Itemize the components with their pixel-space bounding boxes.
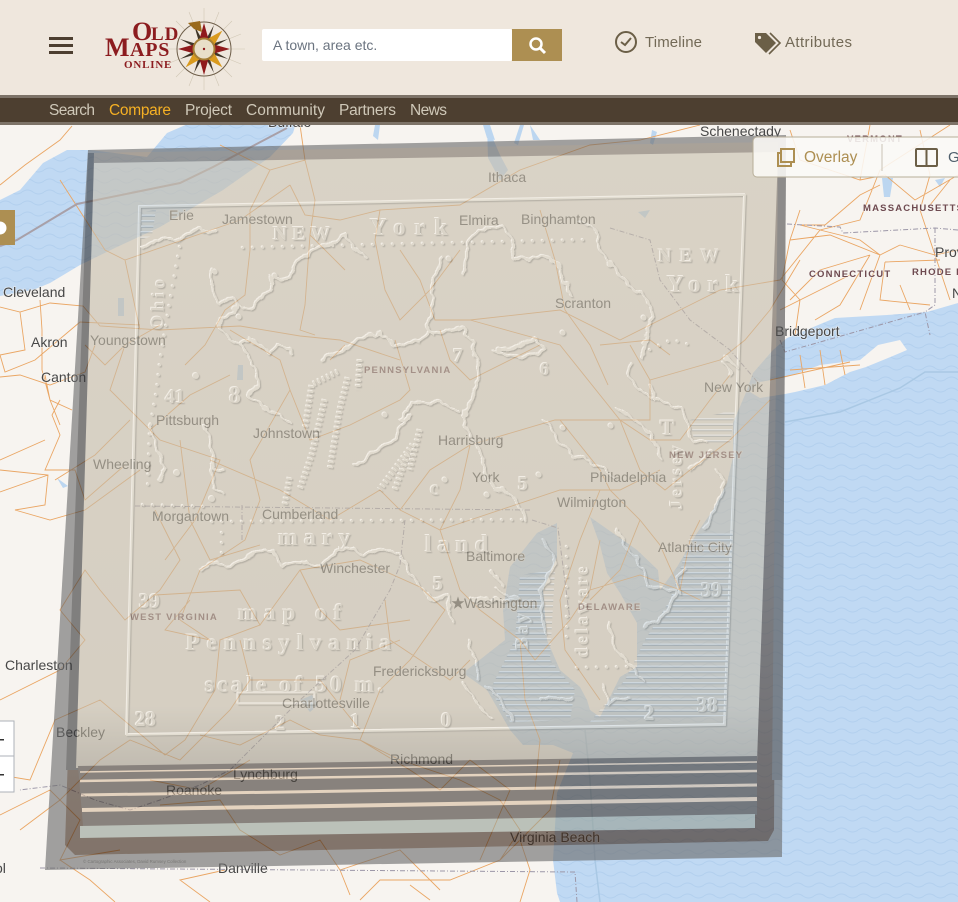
map place labels: Charleston bbox=[5, 657, 73, 673]
map place labels: Ithaca bbox=[488, 169, 526, 185]
state borders bbox=[20, 224, 958, 902]
map place labels: VERMONT bbox=[847, 134, 903, 145]
embossed lettering: 5 bbox=[433, 573, 443, 595]
dark right cover edge bbox=[772, 160, 786, 780]
map place labels: Youngstown bbox=[90, 332, 166, 348]
embossed lettering: 0 bbox=[441, 708, 452, 732]
scale bar bbox=[238, 693, 315, 704]
logo wordmark: ONLINE bbox=[124, 59, 172, 71]
map place labels: Johnstown bbox=[253, 425, 320, 441]
map place labels: Baltimore bbox=[466, 548, 525, 564]
attributes button: Attributes bbox=[785, 34, 852, 51]
map place labels: NEW JERSEY bbox=[669, 450, 743, 461]
embossed lettering: Pennsylvania bbox=[186, 630, 398, 655]
embossed lettering: 6 bbox=[540, 359, 549, 379]
map place labels: Cumberland bbox=[262, 506, 338, 522]
embossed lettering: York bbox=[370, 215, 457, 241]
inland lakes bbox=[57, 125, 945, 712]
map place labels: Harrisburg bbox=[438, 432, 503, 448]
rivers bbox=[143, 223, 737, 720]
embossed lettering: York bbox=[667, 272, 746, 298]
map place labels: Elmira bbox=[459, 212, 499, 228]
map place labels: Wilmington bbox=[557, 494, 626, 510]
embossed city dots bbox=[174, 256, 647, 502]
scan credit line: © Cartographic Associates, David Rumsey Collection bbox=[83, 859, 187, 864]
logo wordmark: APS bbox=[130, 39, 170, 61]
dark left cover edge bbox=[66, 153, 94, 770]
map place labels: CONNECTICUT bbox=[809, 269, 891, 280]
map place labels: York bbox=[472, 469, 501, 485]
navigation bar: Partners bbox=[339, 102, 396, 119]
overlaid historic embossed map, semi-transparent bbox=[45, 135, 786, 870]
compare mode panel bbox=[753, 137, 958, 177]
embossed lettering: 38 bbox=[697, 693, 718, 717]
embossed lettering: 1 bbox=[350, 709, 360, 733]
map place labels: Wheeling bbox=[93, 456, 151, 472]
scan background bbox=[45, 135, 786, 870]
left map badge bbox=[0, 210, 15, 245]
map place labels: Washington bbox=[464, 595, 537, 611]
map place labels: WEST VIRGINIA bbox=[130, 612, 218, 623]
international boundary on Lake Erie bbox=[0, 128, 287, 246]
embossed lettering: c bbox=[430, 478, 439, 500]
map place labels: Richmond bbox=[390, 751, 453, 767]
ridge marks bbox=[285, 360, 420, 505]
map place labels: Scranton bbox=[555, 295, 611, 311]
embossed lettering: T bbox=[660, 415, 675, 440]
map place labels: Akron bbox=[31, 334, 68, 350]
embossed lettering bbox=[135, 215, 746, 735]
logo bbox=[105, 8, 245, 90]
embossed lettering: delaware bbox=[572, 564, 592, 658]
map place labels: Roanoke bbox=[166, 782, 222, 798]
search box bbox=[262, 29, 562, 61]
logo wordmark: M bbox=[105, 33, 130, 62]
printed inner frame bbox=[127, 195, 745, 735]
map place labels: Jamestown bbox=[222, 211, 293, 227]
map place labels: Beckley bbox=[56, 724, 105, 740]
embossed lettering: 7 bbox=[453, 345, 463, 367]
map place labels: Erie bbox=[169, 207, 194, 223]
navigation bar: Project bbox=[185, 102, 233, 119]
book cover bbox=[65, 142, 778, 855]
map place labels: Atlantic City bbox=[658, 539, 732, 555]
embossed lettering: Jersey bbox=[666, 443, 686, 510]
embossed lettering: Bay bbox=[512, 611, 532, 650]
embossed lettering: mary bbox=[278, 525, 357, 551]
embossed lettering: 39 bbox=[139, 589, 160, 613]
icon: tag bbox=[755, 33, 780, 54]
map place labels: Charlottesville bbox=[282, 695, 370, 711]
embossed lettering: 8 bbox=[229, 383, 241, 409]
timeline button bbox=[616, 32, 702, 52]
map place labels: New York bbox=[704, 379, 764, 395]
Long Island bbox=[750, 340, 907, 398]
icon: side by side bbox=[916, 149, 937, 166]
map place labels: Philadelphia bbox=[590, 469, 666, 485]
embossed lettering: 28 bbox=[135, 707, 156, 731]
icon: overlay bbox=[778, 149, 794, 166]
embossed lettering: 2 bbox=[275, 711, 286, 735]
logo wordmark: LD bbox=[151, 24, 179, 45]
page sheet bbox=[76, 152, 778, 768]
icon: menu bbox=[49, 37, 73, 54]
map place labels: DELAWARE bbox=[578, 602, 641, 613]
search button bbox=[512, 29, 562, 61]
map place labels: Winchester bbox=[320, 560, 390, 576]
pale endpaper strip bbox=[80, 814, 755, 838]
map place labels: Schenectady bbox=[700, 123, 781, 139]
map place labels: Binghamton bbox=[521, 211, 596, 227]
navigation bar: Community bbox=[246, 102, 325, 119]
zoom control bbox=[0, 721, 14, 792]
embossed lettering: map of bbox=[238, 600, 348, 625]
logo wordmark: O bbox=[132, 17, 152, 46]
navigation bar: News bbox=[410, 102, 447, 119]
map place labels: Morgantown bbox=[152, 508, 229, 524]
icon: magnifier bbox=[530, 38, 545, 53]
compass rose bbox=[163, 8, 245, 90]
attributes button bbox=[755, 33, 852, 54]
Atlantic Ocean bbox=[463, 303, 958, 902]
navigation bar: Search bbox=[49, 102, 95, 119]
page block edge stripes bbox=[78, 756, 757, 826]
embossed lettering: 41 bbox=[165, 386, 185, 408]
maritime boundary bbox=[585, 372, 958, 902]
map place labels: Cleveland bbox=[3, 284, 65, 300]
embossed lettering: 5 bbox=[518, 473, 528, 495]
embossed lettering: land bbox=[425, 532, 494, 558]
Lake Erie bbox=[0, 120, 297, 296]
map place labels: Buffalo bbox=[268, 114, 312, 130]
map place labels: Pittsburgh bbox=[156, 412, 219, 428]
header bar bbox=[0, 0, 958, 95]
engraved ocean hatching bbox=[140, 210, 735, 722]
map place labels: Fredericksburg bbox=[373, 663, 466, 679]
navigation bar: Compare bbox=[109, 102, 171, 119]
logo wordmark bbox=[105, 17, 179, 71]
map place labels: Bridgeport bbox=[775, 323, 840, 339]
embossed lettering: 39 bbox=[701, 578, 722, 602]
search box: A town, area etc. bbox=[273, 37, 377, 53]
map place labels: Lynchburg bbox=[233, 766, 298, 782]
overlay label: Overlay bbox=[804, 149, 858, 166]
embossed lettering: NEW bbox=[658, 246, 727, 267]
map place labels: ★ bbox=[451, 595, 465, 611]
embossed rivers, boundaries and lettering bbox=[135, 215, 746, 735]
map place labels: PENNSYLVANIA bbox=[364, 365, 451, 376]
embossed lettering: scale of 50 m. bbox=[205, 672, 387, 697]
icon: clock bbox=[616, 32, 636, 52]
embossed lettering: NEW bbox=[273, 223, 336, 245]
embossed lettering: 2 bbox=[644, 701, 654, 725]
navigation bar bbox=[0, 95, 958, 125]
timeline button: Timeline bbox=[645, 34, 702, 51]
map place labels: Danville bbox=[218, 860, 268, 876]
map place labels: Canton bbox=[41, 369, 86, 385]
embossed lettering: Ohio bbox=[147, 275, 169, 330]
dotted state boundaries bbox=[143, 240, 690, 668]
map place labels: Virginia Beach bbox=[510, 829, 600, 845]
